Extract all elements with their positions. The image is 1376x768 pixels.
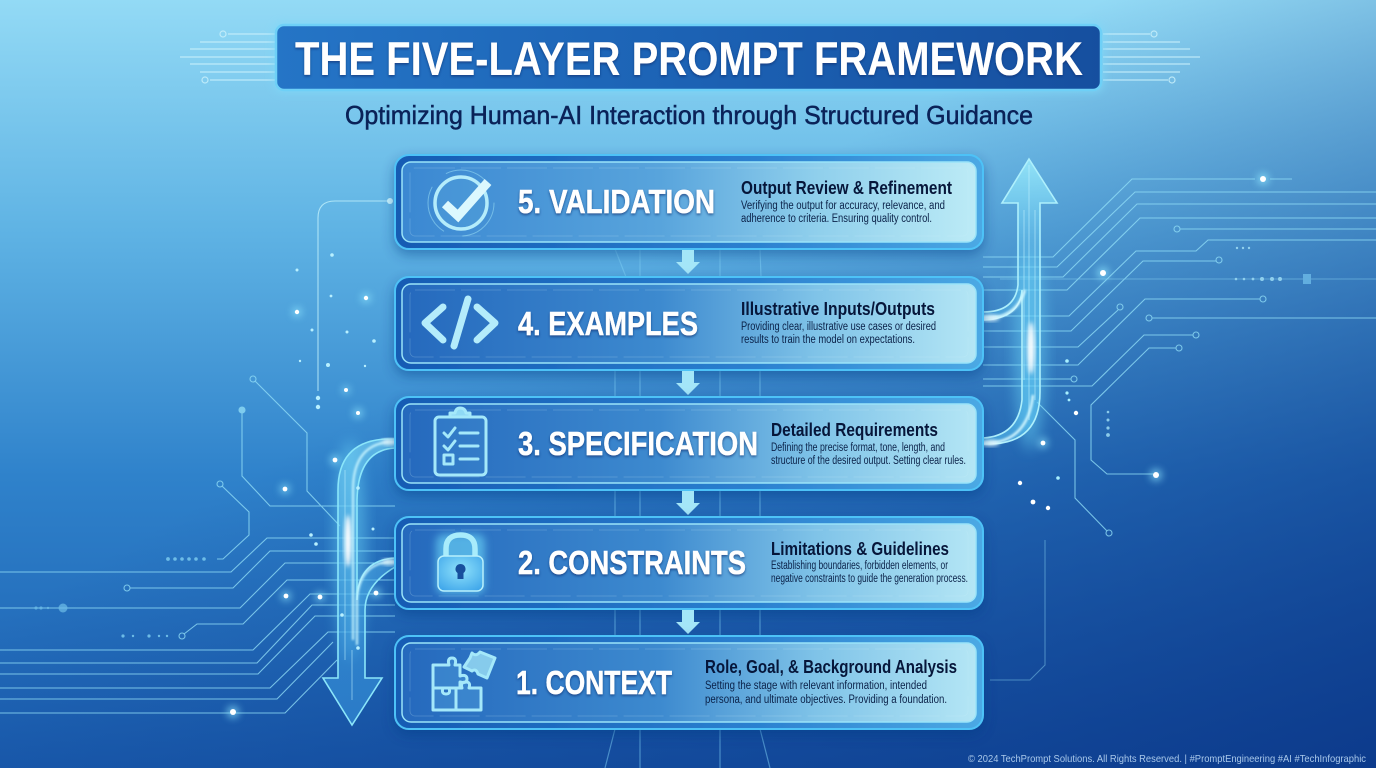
text: detailed requirements: Defining the precise format, tone, length, and [771, 442, 945, 454]
circuit traces: left side [0, 201, 395, 713]
panel: layer 3 specification [395, 397, 983, 490]
text: output review: Verifying the output for accuracy, relevance, and [741, 200, 945, 212]
text: limitations: Limitations & Guidelines [771, 539, 949, 559]
text: limitations [771, 539, 968, 585]
icon: puzzle pieces [433, 652, 495, 710]
panel: layer 2 constraints [395, 517, 983, 609]
text: illustrative inputs [741, 299, 936, 346]
text: output review: Output Review & Refinement [741, 178, 952, 198]
connector traces behind layers [605, 249, 770, 768]
panel: layer 4 examples [395, 277, 983, 370]
panel: layer 5 validation [395, 155, 983, 249]
text: limitations: Establishing boundaries, forbidden elements, or [771, 560, 948, 572]
flow arrow: upward [981, 159, 1057, 450]
title banner [273, 22, 1104, 93]
heading: 3. specification: 3. SPECIFICATION [518, 425, 758, 462]
text: output review [741, 178, 952, 225]
arrow: 4 to 3 [676, 371, 700, 395]
heading: 2. constraints: 2. CONSTRAINTS [518, 544, 746, 581]
icon: check mark in circle [428, 170, 494, 236]
text: role goal background: persona, and ultimate objectives. Providing a foundation. [705, 694, 947, 706]
title: THE FIVE-LAYER PROMPT FRAMEWORK [295, 32, 1083, 85]
subtitle: Optimizing Human-AI Interaction through Structured Guidance [345, 100, 1033, 130]
text: illustrative inputs: results to train the model on expectations. [741, 334, 915, 346]
circuit traces: title banner sides [180, 31, 1200, 83]
icon: padlock [436, 534, 485, 594]
flow arrow: downward [323, 439, 398, 725]
panel: layer 1 context [395, 636, 983, 729]
heading: 5. validation: 5. VALIDATION [518, 183, 715, 220]
heading: 4. examples: 4. EXAMPLES [518, 305, 698, 342]
text: role goal background: Role, Goal, & Background Analysis [705, 657, 957, 677]
heading: 1. context: 1. CONTEXT [516, 664, 672, 701]
text: detailed requirements [771, 420, 966, 467]
arrow: 2 to 1 [676, 610, 700, 634]
icon: code brackets [425, 299, 495, 346]
text: output review: adherence to criteria. Ensuring quality control. [741, 213, 932, 225]
arrow: 3 to 2 [676, 491, 700, 515]
text: limitations: negative constraints to guide the generation process. [771, 573, 968, 585]
text: illustrative inputs: Providing clear, illustrative use cases or desired [741, 321, 936, 333]
text: detailed requirements: Detailed Requirements [771, 420, 938, 440]
glowing particles [227, 173, 1269, 718]
text: detailed requirements: structure of the desired output. Setting clear rules. [771, 455, 966, 467]
circuit traces: right side [983, 179, 1376, 680]
icon: clipboard checklist [435, 408, 486, 475]
arrow: 5 to 4 [676, 250, 700, 274]
text: role goal background [705, 657, 957, 706]
text: role goal background: Setting the stage with relevant information, intended [705, 680, 927, 692]
text: illustrative inputs: Illustrative Inputs/Outputs [741, 299, 935, 319]
